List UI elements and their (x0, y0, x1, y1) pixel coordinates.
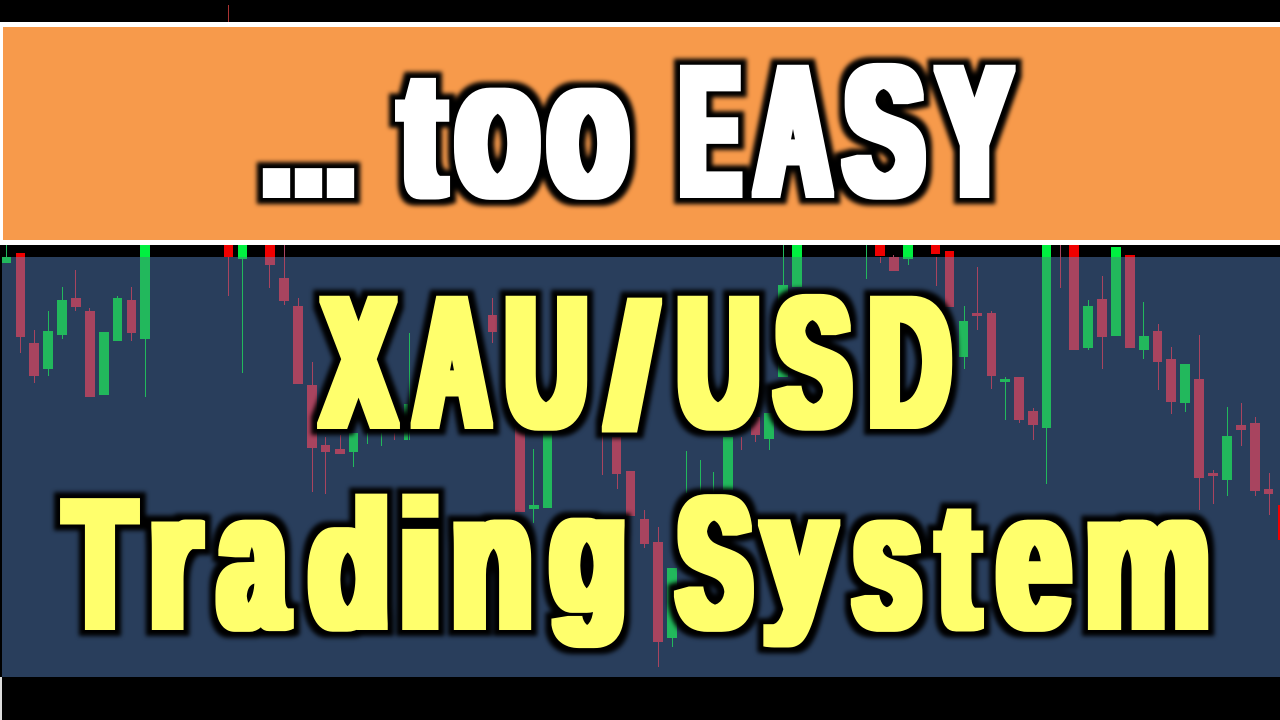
title: Trading System: T (66, 461, 134, 666)
heading: ... too EASY: o (456, 20, 539, 237)
title: XAU/USD: / (607, 269, 657, 463)
bullish candles (2, 245, 1232, 647)
heading: ... too EASY: Y (938, 29, 1011, 235)
left white edge at bottom (0, 677, 2, 720)
title: Trading System (66, 452, 1210, 669)
white frame top line (0, 22, 1280, 245)
title: Trading System: r (150, 452, 200, 669)
title: Trading System: e (998, 452, 1070, 669)
title: Trading System: n (452, 452, 532, 669)
title: Trading System: i (398, 465, 443, 666)
title: XAU/USD: U (678, 260, 759, 466)
title: Trading System: m (1085, 452, 1210, 669)
heading: ... too EASY: S (844, 29, 924, 235)
title: Trading System: y (764, 461, 834, 646)
title: XAU/USD: D (870, 260, 950, 466)
title: Trading System: t (939, 467, 978, 665)
heading: ... too EASY: E (681, 29, 739, 235)
title: XAU/USD: U (506, 260, 587, 466)
title: XAU/USD (323, 260, 950, 466)
title: Trading System: a (219, 452, 287, 669)
title: XAU/USD: A (415, 260, 489, 466)
bright green candle tops in black band (140, 245, 1121, 257)
heading: ... too EASY: . (263, 50, 290, 229)
heading: ... too EASY: . (295, 50, 322, 229)
bearish candles (16, 245, 1273, 667)
heading: ... too EASY: o (548, 20, 628, 237)
title: Trading System: g (551, 461, 626, 646)
title: XAU/USD: S (776, 260, 850, 466)
title: Trading System: S (678, 460, 751, 667)
title: Trading System: d (309, 465, 389, 666)
black band above chart (0, 245, 1280, 257)
bright red candle tops in black band (16, 245, 1280, 540)
top black strip tick (228, 5, 229, 22)
heading: ... too EASY: . (327, 50, 354, 229)
heading: ... too EASY: t (400, 38, 445, 233)
chart panel background (2, 257, 1280, 677)
candlestick chart (2, 245, 1280, 667)
title: XAU/USD: X (323, 260, 394, 466)
title: Trading System: s (854, 452, 920, 669)
orange banner (3, 27, 1280, 240)
heading: ... too EASY (263, 20, 1011, 237)
heading: ... too EASY: A (756, 29, 830, 235)
